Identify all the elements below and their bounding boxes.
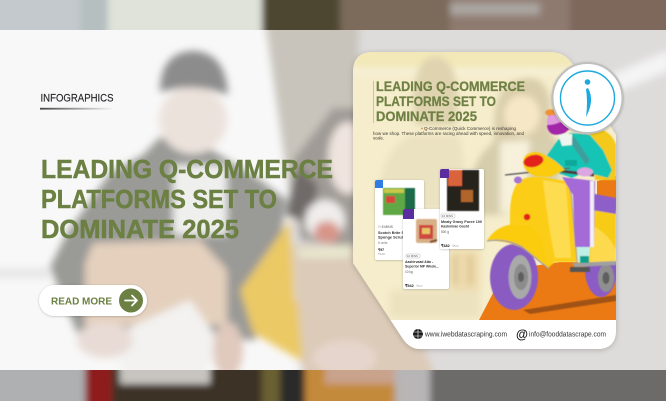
panel intro paragraph: how we shop. These platforms are racing ahead with speed, innovation, and [373, 131, 525, 136]
read more button [39, 285, 147, 316]
rear leg [594, 193, 616, 215]
product card: ready meal pouch: 500 g [441, 230, 449, 234]
illustration: rider on yellow scooter [487, 109, 617, 310]
panel title [373, 79, 525, 124]
product card: ready meal pouch: 10 MINS [442, 214, 453, 218]
icon: arrow in circle [119, 288, 143, 312]
footer: email contact: @ [516, 328, 528, 342]
product card: atta: 10 MINS [407, 254, 418, 258]
leg shield body [510, 177, 577, 268]
main heading: LEADING Q-COMMERCE [41, 156, 333, 184]
product card: ready meal pouch: ₹482 [441, 243, 450, 248]
panel title: LEADING Q-COMMERCE [376, 79, 525, 94]
product card: ready meal pouch: Kashmiran Gosht [441, 224, 470, 228]
shoe [577, 247, 590, 263]
product card: atta: Superior MP Whole... [405, 264, 439, 268]
trousers [562, 177, 595, 247]
product card: ready meal pouch: Meaty Gravy Pureé 100 [441, 220, 482, 224]
panel intro paragraph: Q-Commerce (Quick Commerce) is reshaping [424, 126, 517, 131]
product card: ready meal pouch [440, 169, 484, 249]
footer: email contact: info@fooddatascrape.com [529, 332, 606, 338]
product card: ready meal pouch: ₹500 [452, 244, 459, 248]
footer: website contact [413, 329, 507, 339]
product card: scrub sponge: ₹97 [378, 248, 384, 252]
panel title: DOMINATE 2025 [376, 109, 478, 124]
logo badge [552, 63, 622, 133]
product card: scrub sponge: Sponge Scrub [378, 236, 405, 240]
jacket [546, 133, 612, 178]
read more button: READ MORE [51, 296, 112, 308]
product card: scrub sponge: 6 units [378, 241, 388, 245]
backpack [590, 130, 616, 180]
product card: atta: ₹542 [405, 283, 414, 288]
product card: scrub sponge: Scotch Brite S [378, 231, 405, 235]
rear body [573, 208, 616, 265]
faded store scene [354, 52, 573, 317]
category label: INFOGRAPHICS [40, 92, 114, 104]
handlebar [505, 168, 570, 175]
front fender [487, 224, 549, 268]
footer: website contact: www.iwebdatascraping.com [424, 332, 507, 338]
panel intro paragraph: scale. [373, 136, 384, 141]
category label [40, 92, 114, 110]
faded woman [291, 105, 353, 250]
floorboard [572, 261, 616, 267]
panel: infographic preview card [353, 45, 617, 349]
main heading: PLATFORMS SET TO [41, 186, 277, 214]
product card: atta: ₹600 [416, 284, 423, 288]
orange floor [479, 262, 616, 320]
product card: atta [403, 209, 449, 289]
faded man [50, 137, 287, 340]
main heading [41, 156, 333, 244]
head [558, 134, 572, 146]
panel title: PLATFORMS SET TO [376, 94, 496, 109]
white footer strip [390, 320, 616, 349]
product card: scrub sponge: ⏱ 8 MINS [378, 225, 394, 229]
main heading: DOMINATE 2025 [41, 216, 239, 244]
headlight cowl [523, 152, 565, 177]
product card: atta: Aashirvaad Atta - [405, 260, 434, 264]
front wheel [490, 244, 538, 310]
rear wheel [584, 262, 616, 298]
product card: scrub sponge: ₹100 [378, 252, 385, 256]
product card: atta: 10 kg [405, 270, 413, 274]
panel intro paragraph [373, 126, 525, 141]
footer: email contact [516, 328, 606, 342]
product card: scrub sponge [375, 180, 424, 260]
